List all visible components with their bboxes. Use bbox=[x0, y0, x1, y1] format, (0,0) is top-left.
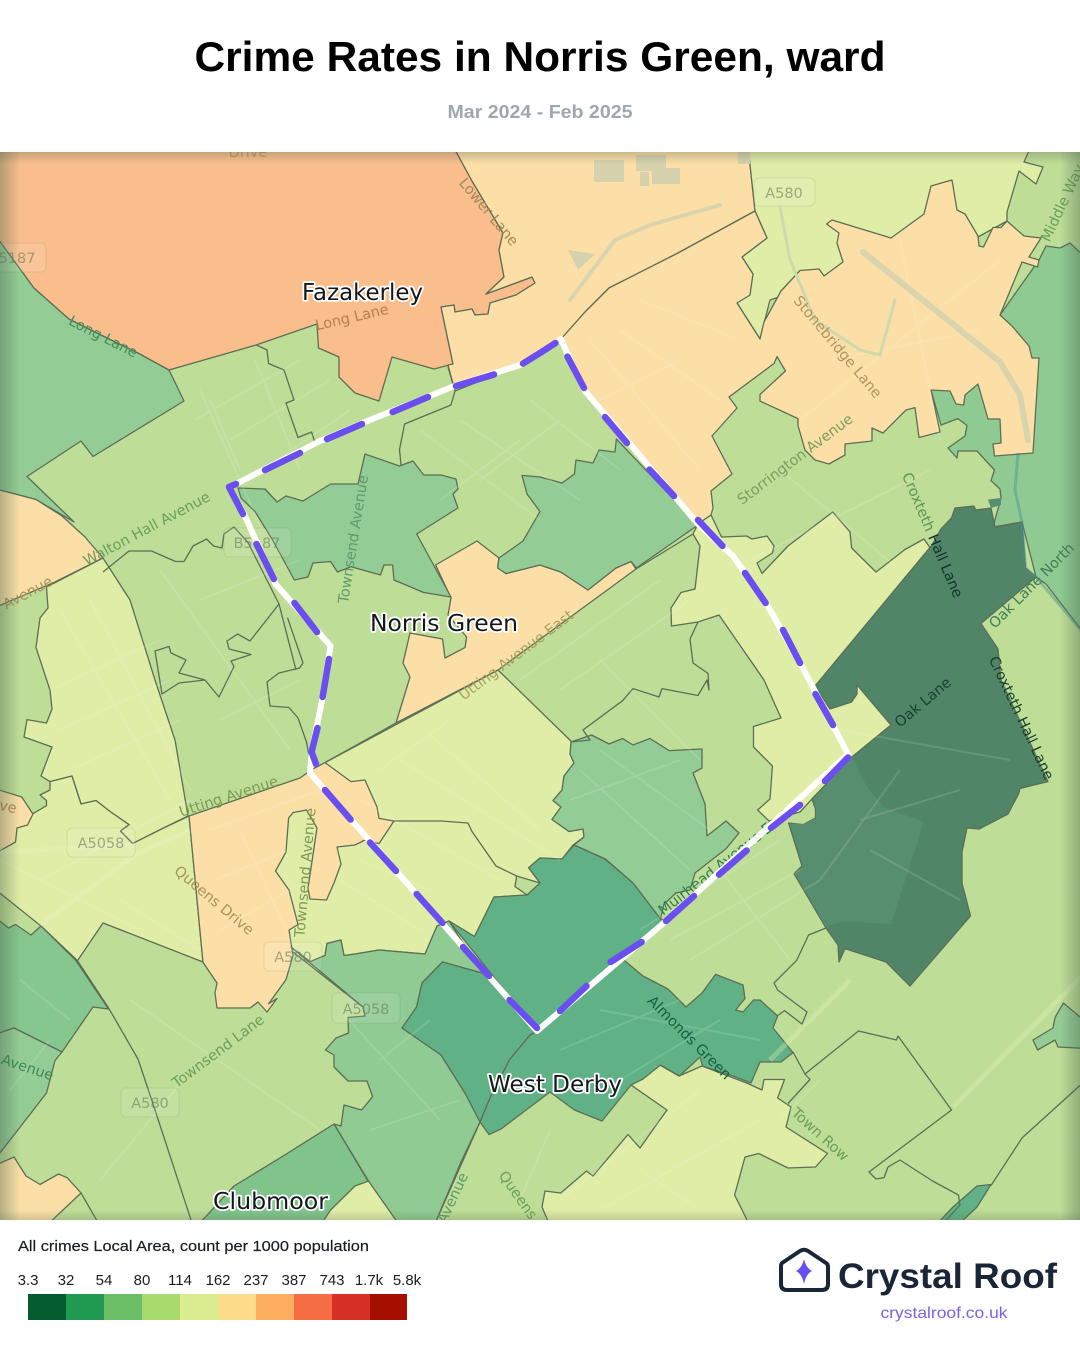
legend scale values: 114 bbox=[168, 1272, 192, 1289]
area: Clubmoor lime bbox=[323, 1180, 396, 1220]
road labels: Utting Avenue bbox=[177, 774, 280, 821]
legend scale values: 3.3 bbox=[18, 1272, 38, 1289]
road labels: Town Row bbox=[787, 1105, 852, 1165]
road labels: Croxteth Hall Lane bbox=[985, 654, 1056, 783]
area: central lime bbox=[270, 670, 584, 962]
subtitle: date range: Mar 2024 - Feb 2025 bbox=[448, 102, 632, 122]
road labels: Drive bbox=[229, 145, 267, 161]
road labels: Lower Lane bbox=[455, 175, 521, 249]
legend scale values: 80 bbox=[134, 1272, 150, 1289]
road labels: Avenue bbox=[1, 574, 56, 613]
road labels: Oak Lane North bbox=[986, 540, 1078, 632]
top buildings bbox=[568, 152, 750, 270]
area: right mid green bbox=[931, 243, 1080, 636]
ward boundary: white line bbox=[229, 339, 848, 1031]
road shields: A5058 bbox=[343, 1002, 389, 1018]
place labels bbox=[213, 280, 622, 1215]
area: central yellow bbox=[396, 541, 636, 723]
area: West Derby lower lime bbox=[542, 1065, 828, 1226]
road labels: Avenue bbox=[435, 1170, 472, 1226]
road labels: Muirhead Avenue East bbox=[656, 806, 794, 919]
logo icon: house with star bbox=[781, 1250, 828, 1290]
area: south mid green bbox=[291, 921, 482, 1226]
area: south-east dark sliver bbox=[940, 1184, 992, 1220]
area: south-east mid green patch bbox=[1033, 1003, 1080, 1050]
road labels: Townsend Avenue bbox=[292, 807, 320, 939]
area: south-west lime bbox=[0, 776, 203, 962]
legend scale values: 54 bbox=[96, 1272, 112, 1289]
logo wordmark: Crystal Roof bbox=[838, 1257, 1057, 1296]
area: Fazakerley orange bbox=[0, 146, 535, 401]
road labels: Stonebridge Lane bbox=[790, 293, 884, 402]
road shields: A5058 bbox=[78, 836, 124, 852]
area: lighter part of the dark green bbox=[790, 757, 924, 927]
area: Almonds Green dark green bbox=[480, 959, 793, 1134]
area boundary lines bbox=[77, 345, 1080, 1226]
area: west of West Derby dark green bbox=[402, 962, 537, 1122]
legend scale values: 387 bbox=[281, 1272, 307, 1289]
area: park dark green bbox=[449, 845, 666, 1031]
legend scale values bbox=[18, 1272, 422, 1289]
road labels: Storrington Avenue bbox=[735, 411, 856, 508]
river on the east side bbox=[1015, 453, 1080, 636]
area: top-right lime bbox=[737, 146, 1043, 339]
rail line and stream, grey-toned features bbox=[570, 205, 1028, 440]
area: northern yellow bbox=[441, 146, 755, 391]
area: east lime corridor bbox=[671, 512, 935, 821]
legend scale values: 162 bbox=[205, 1272, 231, 1289]
title: Crime Rates in Norris Green, ward bbox=[194, 33, 886, 80]
area: left yellow ive bbox=[0, 789, 33, 853]
area: bottom-left yellow bbox=[0, 1157, 81, 1226]
area: Clubmoor mid green bbox=[197, 1124, 400, 1226]
legend scale values: 237 bbox=[243, 1272, 269, 1289]
area: Croxteth dark green bbox=[789, 506, 1048, 986]
legend scale values: 743 bbox=[319, 1272, 345, 1289]
area: far south-west mid green bbox=[0, 1028, 62, 1158]
legend scale values: 5.8k bbox=[393, 1272, 422, 1289]
road labels: Almonds Green bbox=[644, 993, 734, 1083]
area: east ward mid green bbox=[498, 439, 698, 590]
legend scale values: 1.7k bbox=[355, 1272, 384, 1289]
ward boundary: purple dashes bbox=[229, 343, 848, 1028]
road shields bbox=[0, 178, 815, 1117]
place labels: West Derby bbox=[488, 1072, 622, 1098]
road labels: Long Lane bbox=[314, 302, 390, 334]
map edge vignette bbox=[0, 152, 1080, 1220]
place labels: Norris Green bbox=[370, 611, 518, 637]
road shields: A580 bbox=[131, 1096, 169, 1112]
road labels: Walton Hall Avenue bbox=[81, 489, 213, 570]
street network bbox=[0, 240, 1010, 1210]
area: west yellow bbox=[0, 489, 103, 607]
road labels: Queens Drive bbox=[171, 863, 256, 939]
road labels: Utting Avenue East bbox=[456, 607, 577, 704]
road labels: Croxteth Hall Lane bbox=[898, 470, 965, 600]
legend scale values: 32 bbox=[58, 1272, 74, 1289]
area: Long Lane mid green bbox=[0, 236, 184, 522]
road shields: A580 bbox=[765, 186, 803, 202]
area: north-east yellow bbox=[561, 180, 1041, 524]
road labels: Townsend Avenue bbox=[336, 474, 372, 606]
place labels: Clubmoor bbox=[213, 1189, 329, 1215]
area: west lime bbox=[24, 558, 188, 844]
road labels: Long Lane bbox=[66, 313, 140, 362]
road shields: B5187 bbox=[234, 536, 280, 552]
area: small dark patch bbox=[988, 498, 1001, 508]
area: south-west mid green bbox=[0, 918, 108, 1052]
place labels: Fazakerley bbox=[302, 280, 423, 306]
road labels: Queens bbox=[495, 1169, 540, 1223]
area: Townsend mid green bbox=[238, 454, 458, 597]
road labels: Townsend Lane bbox=[169, 1012, 268, 1092]
legend colour bar bbox=[28, 1294, 407, 1320]
road shields: A580 bbox=[274, 950, 312, 966]
road labels: Avenue bbox=[0, 1052, 55, 1084]
road labels: Oak Lane bbox=[892, 675, 955, 731]
legend title: All crimes Local Area, count per 1000 population bbox=[18, 1238, 369, 1255]
logo url: crystalroof.co.uk bbox=[880, 1305, 1009, 1322]
area: Muirhead mid green bbox=[552, 735, 739, 919]
area: Utting yellow bbox=[189, 763, 394, 1012]
